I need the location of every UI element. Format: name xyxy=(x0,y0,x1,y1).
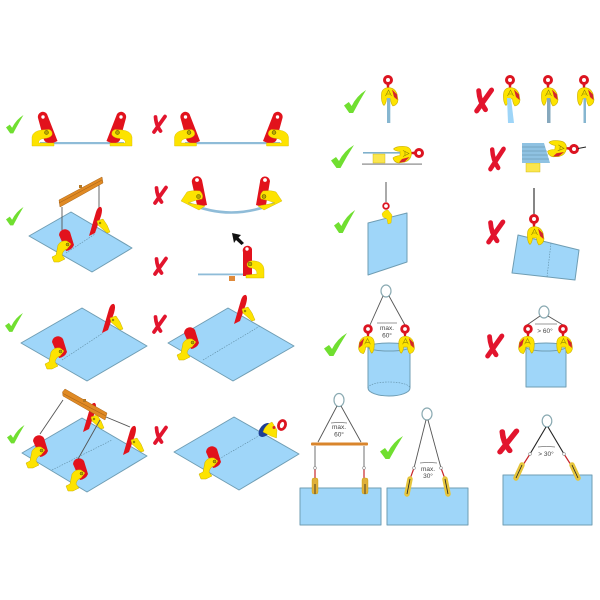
icon: check row 3 xyxy=(5,313,23,332)
diagram: beam lift with max 60 degree angle: 60° xyxy=(334,430,344,438)
diagram: plate hanging from clamp xyxy=(368,182,407,275)
icon: cross cylinder xyxy=(488,336,502,356)
icon: check sling 30 xyxy=(380,436,403,459)
icon: cross horizontal xyxy=(490,149,504,169)
diagram: four clamps with spreader on plate xyxy=(22,389,147,492)
diagram: round vessel with max 60 degree sling xyxy=(358,285,414,396)
icon: check row 2 xyxy=(6,207,23,225)
icon: cross sling 30 xyxy=(500,431,516,452)
diagram: incorrect side clamps on flat plate xyxy=(174,112,288,146)
diagram: beam lift with max 60 degree angle: max. xyxy=(332,424,346,431)
diagram: sling lift with max 30 degree angle: max. xyxy=(421,466,435,473)
diagram: correct side clamps on flat plate xyxy=(32,112,132,146)
diagram: round vessel with max 60 degree sling: 60° xyxy=(382,332,392,340)
diagram: clamp on plate stack xyxy=(522,140,586,172)
icon: check row 4 xyxy=(7,425,24,443)
diagram: clamp with blue body on plate xyxy=(174,417,299,490)
icon: cross row 3b xyxy=(154,316,165,332)
diagram: clamp on vertical plate xyxy=(381,76,398,123)
diagram: sling lift over 30 degree angle: > 30° xyxy=(538,450,554,458)
icon: cross vertical xyxy=(477,90,492,111)
arrow: lift direction xyxy=(232,233,244,245)
diagram: clamps on bent plate xyxy=(181,176,282,212)
diagram: two clamps centred on plate xyxy=(21,304,147,381)
icon: check cylinder xyxy=(324,333,347,356)
diagram: three incorrect vertical plate clamps xyxy=(503,76,594,123)
icon: check hanging plate xyxy=(334,210,355,233)
diagram: round vessel with max 60 degree sling: max. xyxy=(380,325,394,332)
diagram: clamp on supported plate xyxy=(362,146,422,165)
diagram: tilted plate hanging from clamp xyxy=(512,188,579,280)
diagram: sling lift over 30 degree angle xyxy=(503,415,592,525)
diagram: clamps off centre on plate xyxy=(168,295,294,381)
diagram: vessel with greater than 60 degree sling: > 60° xyxy=(537,327,553,335)
icon: check horizontal xyxy=(331,145,354,168)
diagram: vessel with greater than 60 degree sling xyxy=(518,306,572,387)
diagram: beam lift with max 60 degree angle xyxy=(300,394,381,525)
icon: cross row 1 xyxy=(154,116,165,132)
icon: check vertical xyxy=(344,90,366,113)
diagram: two clamps with beam on plate xyxy=(29,177,132,272)
diagram: sling lift with max 30 degree angle xyxy=(387,408,468,525)
icon: cross row 4 xyxy=(155,428,166,443)
icon: cross hanging plate xyxy=(489,222,503,242)
icon: cross row 3 xyxy=(155,258,166,274)
diagram: clamp on plate resting on support xyxy=(198,246,264,281)
diagram: sling lift with max 30 degree angle: 30° xyxy=(423,472,433,480)
icon: cross row 2 xyxy=(155,188,166,203)
icon: check row 1 xyxy=(6,115,23,133)
